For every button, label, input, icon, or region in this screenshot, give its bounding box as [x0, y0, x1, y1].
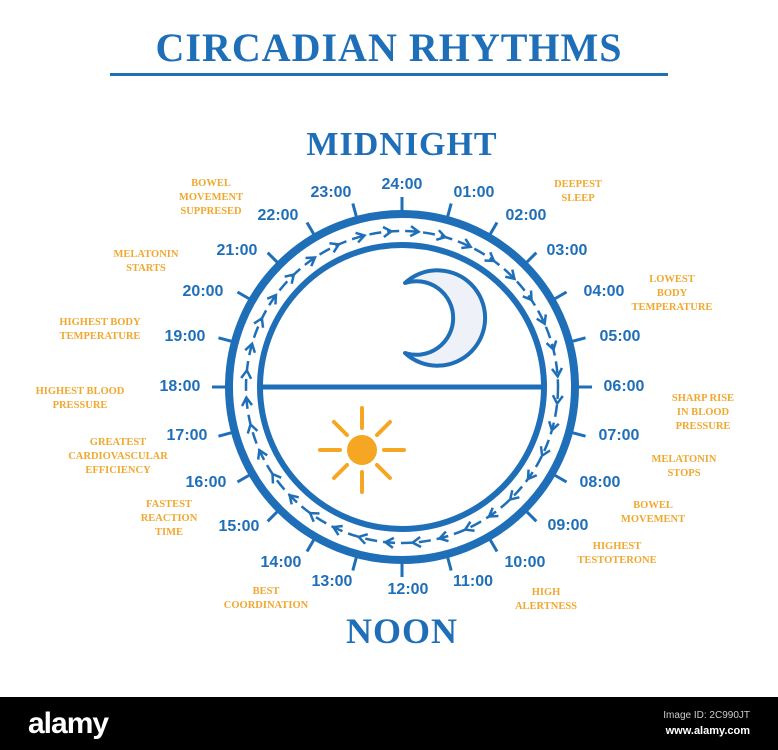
annotations: REACTION	[141, 513, 198, 524]
icon: sun	[320, 408, 404, 492]
annotations: MELATONIN	[114, 249, 179, 260]
annotations: FASTEST	[146, 499, 192, 510]
hour labels: 13:00	[312, 573, 353, 590]
annotations: DEEPEST	[554, 179, 602, 190]
annotations: MOVEMENT	[179, 192, 243, 203]
hour labels: 19:00	[165, 328, 206, 345]
hour labels	[160, 176, 645, 598]
hour labels: 03:00	[547, 242, 588, 259]
annotations: BODY	[657, 288, 688, 299]
hour labels: 20:00	[183, 283, 224, 300]
annotations: PRESSURE	[676, 421, 730, 432]
annotations: HIGHEST	[593, 541, 641, 552]
annotations: TIME	[155, 527, 183, 538]
hour labels: 10:00	[505, 554, 546, 571]
clock dial	[212, 197, 592, 577]
footer bar	[0, 697, 778, 750]
hour labels: 21:00	[217, 242, 258, 259]
annotations: HIGHEST BLOOD	[36, 386, 125, 397]
annotations: BEST	[253, 586, 279, 597]
annotations: SLEEP	[561, 193, 595, 204]
annotations: MOVEMENT	[621, 514, 685, 525]
hour labels: 01:00	[454, 184, 495, 201]
annotations: COORDINATION	[224, 600, 309, 611]
title: CIRCADIAN RHYTHMS	[155, 25, 623, 70]
footer bar: www.alamy.com	[665, 725, 750, 737]
annotations: HIGH	[532, 587, 560, 598]
annotations: IN BLOOD	[677, 407, 730, 418]
heading: noon: NOON	[346, 611, 458, 651]
footer bar: Image ID: 2C990JT	[663, 710, 750, 721]
hour labels: 24:00	[382, 176, 423, 193]
heading: midnight: MIDNIGHT	[306, 126, 498, 163]
hour labels: 02:00	[506, 207, 547, 224]
hour labels: 06:00	[604, 378, 645, 395]
annotations: STOPS	[667, 468, 701, 479]
annotations: BOWEL	[191, 178, 231, 189]
annotations: SHARP RISE	[672, 393, 734, 404]
annotations: EFFICIENCY	[85, 465, 151, 476]
hour labels: 04:00	[584, 283, 625, 300]
annotations: TESTOTERONE	[577, 555, 657, 566]
hour labels: 05:00	[600, 328, 641, 345]
icon: moon	[405, 270, 485, 366]
annotations: BOWEL	[633, 500, 673, 511]
annotations: CARDIOVASCULAR	[68, 451, 168, 462]
hour labels: 09:00	[548, 517, 589, 534]
hour labels: 18:00	[160, 378, 201, 395]
footer bar: alamy	[28, 707, 109, 740]
annotations: PRESSURE	[53, 400, 107, 411]
annotations: LOWEST	[649, 274, 695, 285]
annotations: TEMPERATURE	[60, 331, 140, 342]
annotations: ALERTNESS	[515, 601, 577, 612]
annotations	[36, 178, 734, 612]
hour labels: 15:00	[219, 518, 260, 535]
hour labels: 23:00	[311, 184, 352, 201]
annotations: SUPPRESED	[180, 206, 242, 217]
annotations: MELATONIN	[652, 454, 717, 465]
annotations: TEMPERATURE	[632, 302, 712, 313]
annotations: HIGHEST BODY	[59, 317, 141, 328]
hour labels: 17:00	[167, 427, 208, 444]
hour labels: 16:00	[186, 474, 227, 491]
hour labels: 14:00	[261, 554, 302, 571]
hour labels: 11:00	[453, 573, 493, 590]
hour labels: 07:00	[599, 427, 640, 444]
hour labels: 22:00	[258, 207, 299, 224]
hour labels: 12:00	[388, 581, 429, 598]
hour labels: 08:00	[580, 474, 621, 491]
annotations: GREATEST	[90, 437, 146, 448]
annotations: STARTS	[126, 263, 166, 274]
